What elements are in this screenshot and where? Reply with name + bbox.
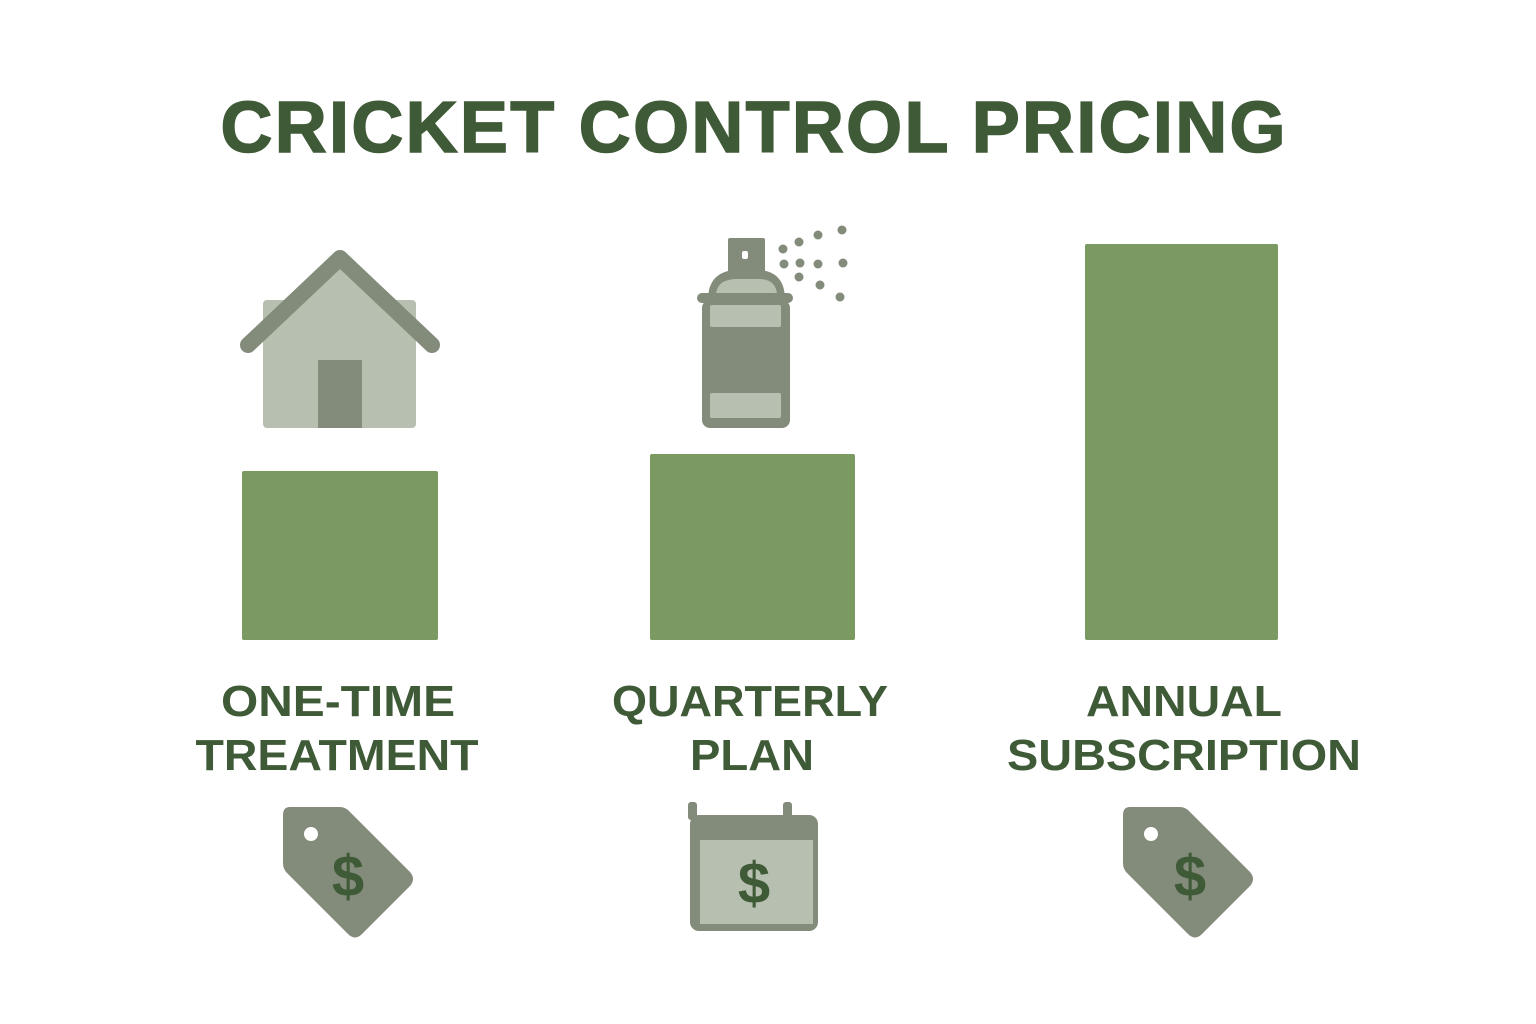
title: CRICKET CONTROL PRICING [220,88,1286,168]
label: annual subscription [1007,677,1361,780]
label: quarterly plan [612,677,888,780]
label: quarterly plan: PLAN [690,731,814,780]
icon: house [248,258,432,428]
label: one-time treatment [196,677,479,780]
label: annual subscription: ANNUAL [1086,677,1282,726]
label: one-time treatment: TREATMENT [196,731,479,780]
icon: price tag 1: $ [332,844,364,909]
icon: price tag 3 [1123,807,1253,938]
icon: price tag 3: $ [1174,844,1206,909]
bar: one-time [242,471,438,640]
icon: spray can [697,226,848,428]
bar: quarterly [650,454,855,640]
label: quarterly plan: QUARTERLY [612,677,888,726]
label: one-time treatment: ONE-TIME [221,677,455,726]
icon: calendar [688,802,818,931]
icon: calendar: $ [738,851,770,916]
icon: price tag 1 [283,807,413,938]
bar: annual [1085,244,1278,640]
label: annual subscription: SUBSCRIPTION [1007,731,1361,780]
